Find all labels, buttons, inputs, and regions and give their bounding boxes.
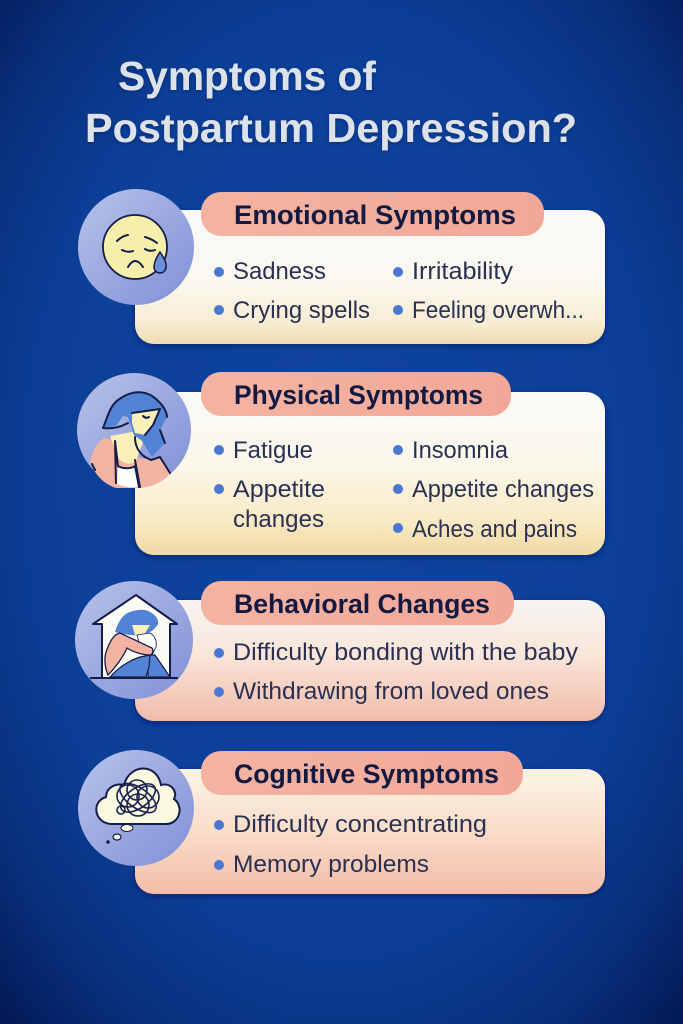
list: cognitive symptoms — [214, 811, 487, 878]
heading: physical symptoms: Physical Symptoms — [234, 380, 483, 410]
list: physical symptoms: Appetite — [233, 476, 325, 503]
card: cognitive — [135, 769, 605, 894]
heading: emotional symptoms — [201, 192, 544, 236]
card: emotional — [135, 210, 605, 344]
list: behavioral changes: Withdrawing from loved ones — [233, 678, 549, 705]
title — [85, 53, 577, 151]
list: physical symptoms: Aches and pains — [412, 516, 577, 543]
icon: thought cloud with tangled scribble — [78, 750, 194, 866]
list: emotional symptoms: Sadness — [233, 258, 326, 285]
list: physical symptoms: Insomnia — [412, 437, 509, 464]
heading: cognitive symptoms: Cognitive Symptoms — [234, 759, 499, 789]
title: Symptoms of — [118, 53, 376, 99]
list: physical symptoms: changes — [233, 506, 324, 533]
icon: woman with head down — [77, 373, 191, 488]
panel: behavioral changes — [75, 581, 605, 721]
list: emotional symptoms: Feeling overwh... — [412, 297, 584, 324]
heading: behavioral changes: Behavioral Changes — [234, 589, 490, 619]
title: Postpartum Depression? — [85, 105, 577, 151]
card: physical — [135, 392, 605, 555]
list: physical symptoms — [214, 437, 594, 543]
list: physical symptoms: Fatigue — [233, 437, 313, 464]
heading: physical symptoms — [201, 372, 511, 416]
card: behavioral — [135, 600, 605, 721]
list: cognitive symptoms: Difficulty concentrating — [233, 811, 487, 838]
heading: behavioral changes — [201, 581, 514, 625]
icon: sad face with tear — [78, 189, 194, 305]
icon: woman hugging knees in house — [75, 581, 193, 699]
list: behavioral changes: Difficulty bonding with the baby — [233, 639, 578, 666]
heading: cognitive symptoms — [201, 751, 523, 795]
panel: physical symptoms — [77, 372, 605, 555]
list: emotional symptoms — [214, 258, 584, 324]
list: physical symptoms: Appetite changes — [412, 476, 594, 503]
list: emotional symptoms: Crying spells — [233, 297, 370, 324]
panel: cognitive symptoms — [78, 750, 605, 894]
panel: emotional symptoms — [78, 189, 605, 344]
list: behavioral changes — [214, 639, 578, 705]
heading: emotional symptoms: Emotional Symptoms — [234, 200, 516, 230]
list: emotional symptoms: Irritability — [412, 258, 513, 285]
list: cognitive symptoms: Memory problems — [233, 851, 429, 878]
